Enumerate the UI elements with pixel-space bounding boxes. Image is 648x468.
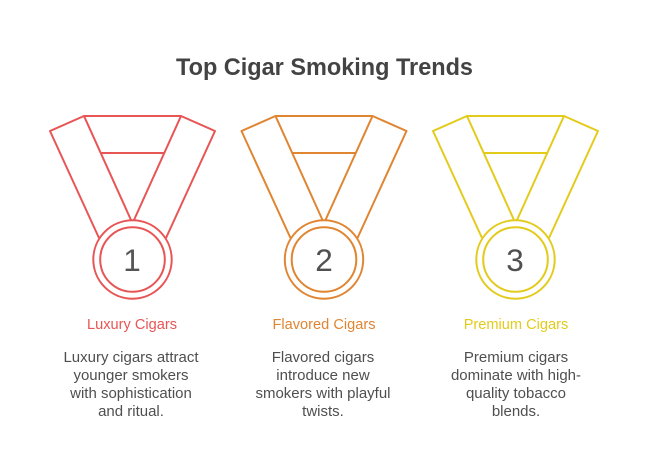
description: flavored cigars: introduce new (276, 367, 370, 384)
heading: flavored cigars: Flavored Cigars (272, 317, 376, 333)
description: premium cigars: blends. (492, 403, 540, 420)
description: premium cigars: dominate with high- (451, 367, 581, 384)
icon: yellow medal (433, 116, 598, 299)
number 3: 3 (506, 242, 524, 278)
description: luxury cigars: Luxury cigars attract (63, 349, 199, 366)
panel: flavored cigars (242, 116, 406, 420)
description: luxury cigars: with sophistication (69, 385, 192, 402)
number 1: 1 (123, 242, 141, 278)
description: premium cigars: quality tobacco (466, 385, 566, 402)
description: luxury cigars: younger smokers (73, 367, 189, 384)
description: flavored cigars: twists. (302, 403, 344, 420)
number 2: 2 (315, 242, 333, 278)
icon: red medal (50, 116, 215, 299)
description: premium cigars: Premium cigars (464, 349, 568, 366)
description: flavored cigars: Flavored cigars (272, 349, 374, 366)
panel: luxury cigars (50, 116, 215, 420)
panel: premium cigars (433, 116, 598, 420)
heading: luxury cigars: Luxury Cigars (87, 317, 177, 333)
description: flavored cigars: smokers with playful (255, 385, 391, 402)
heading: premium cigars: Premium Cigars (464, 317, 568, 333)
title: Top Cigar Smoking Trends (176, 54, 473, 81)
icon: orange medal (242, 116, 406, 299)
description: luxury cigars: and ritual. (98, 403, 164, 420)
